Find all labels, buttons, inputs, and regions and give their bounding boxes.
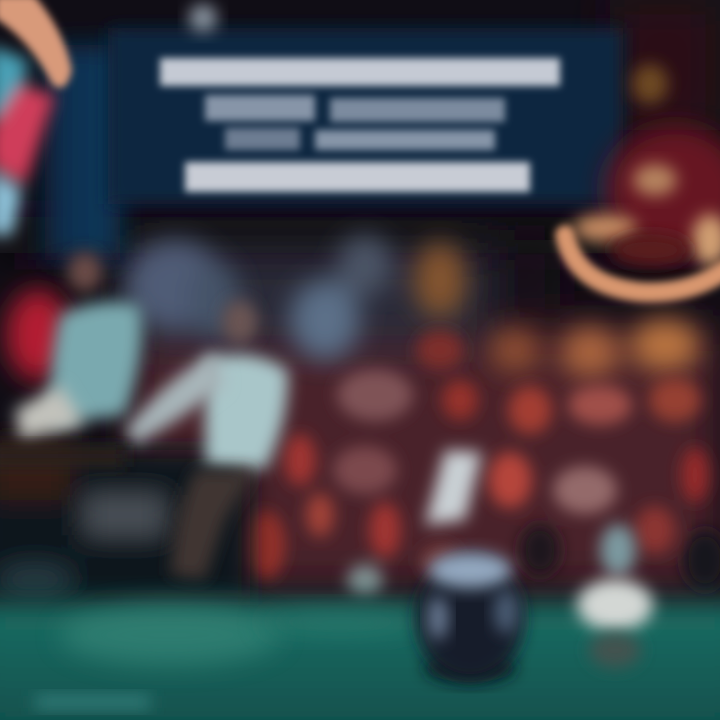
- red backdrop: [6, 289, 70, 381]
- casino lights on the right: [565, 64, 720, 292]
- glowing arc: [565, 235, 720, 292]
- arm: pink limb: [0, 0, 72, 88]
- crowd: red and grey spectators: [245, 330, 720, 596]
- icon: small logo at top: [189, 4, 217, 32]
- left figures: [6, 252, 288, 580]
- person two: [125, 300, 288, 580]
- left blue column: [45, 45, 120, 260]
- white figure on the right: [577, 524, 653, 668]
- gold glow at top: [632, 64, 668, 104]
- ball: shadow: [424, 654, 516, 682]
- left dark seating area: [0, 440, 250, 605]
- panel: navy backing: [108, 28, 623, 204]
- field highlights: [60, 605, 280, 665]
- player with football: [416, 450, 524, 682]
- crowd: background band: [130, 240, 720, 590]
- crowd: upper spectators: [125, 235, 700, 378]
- person one: [15, 252, 142, 440]
- maroon roulette wheel: [605, 125, 720, 255]
- table edge: [0, 445, 125, 467]
- player: white jersey: [425, 450, 482, 525]
- title panel: [45, 4, 623, 260]
- heading: blurred headline bars: [160, 58, 560, 192]
- top-left limb and flag: [0, 0, 72, 235]
- ball: [416, 556, 524, 680]
- football field: [0, 602, 720, 720]
- flag: red white blue: [0, 45, 55, 235]
- backdrop: right maroon glow: [0, 0, 720, 255]
- text mark at bottom left: [35, 695, 150, 709]
